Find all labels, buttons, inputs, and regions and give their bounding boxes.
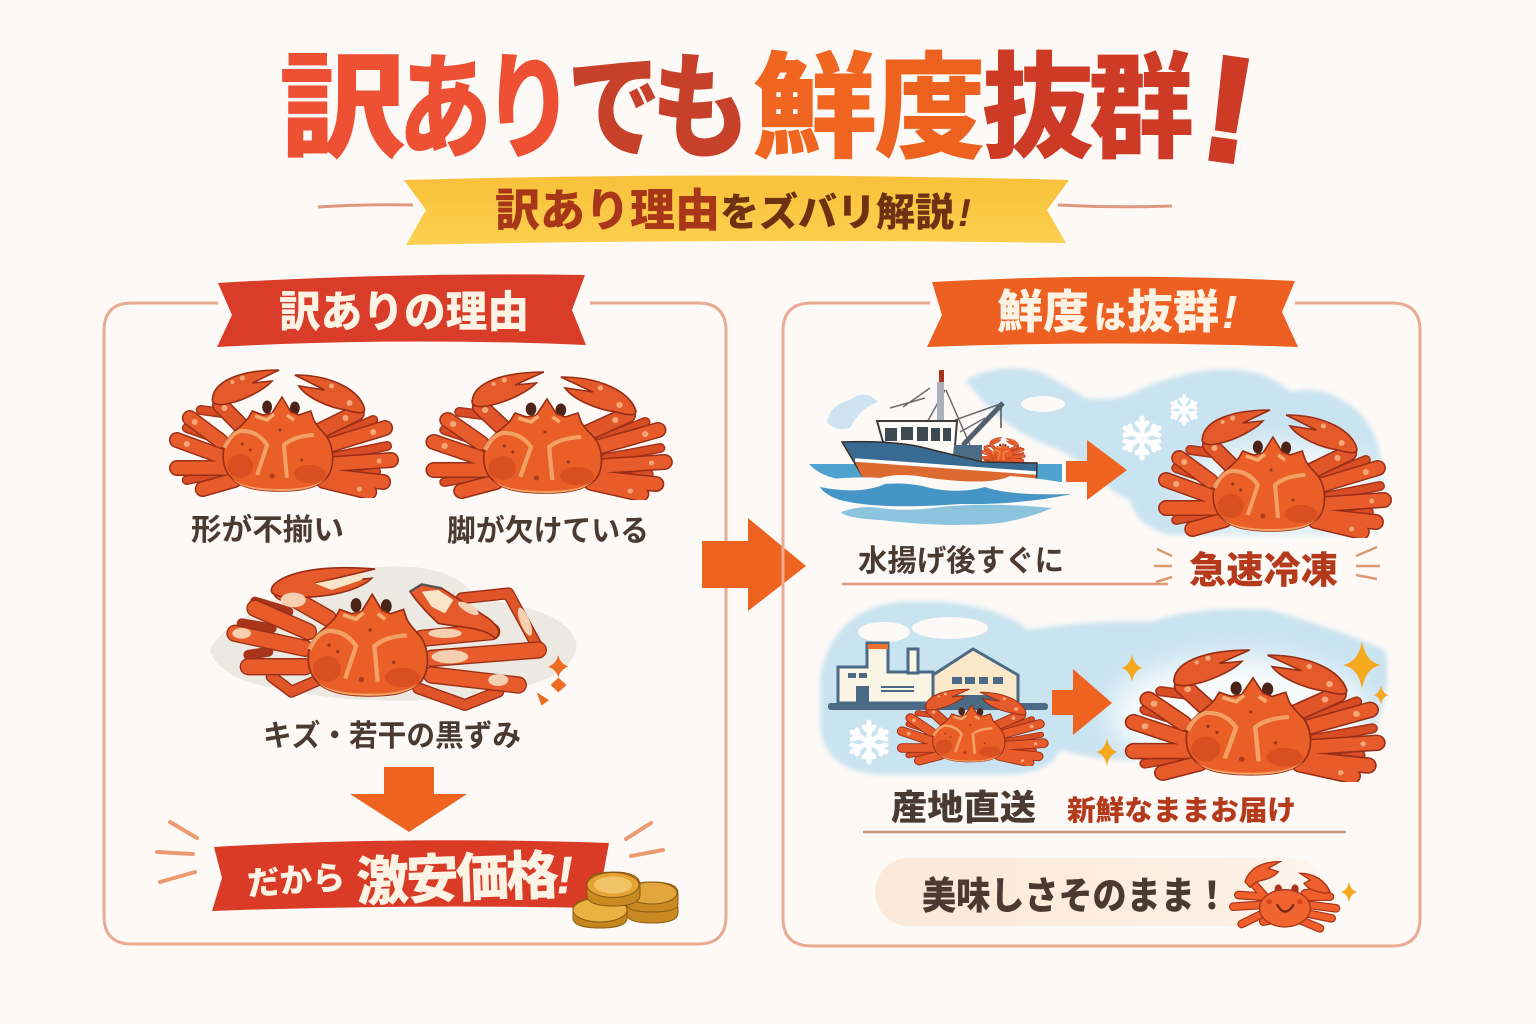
underline	[863, 831, 1346, 833]
label: scratches: キズ・若干の黒ずみ	[263, 719, 521, 753]
title: で	[567, 45, 661, 173]
accent ticks	[842, 547, 1380, 584]
icon: snowflake factory	[852, 722, 886, 762]
subtitle ribbon	[318, 176, 1172, 245]
title: り	[483, 45, 574, 173]
subtitle ribbon: !	[958, 192, 971, 235]
title: 抜	[982, 45, 1094, 173]
crab: uneven shape	[177, 370, 391, 492]
background wash: factory	[820, 602, 1387, 775]
title: あ	[398, 45, 492, 173]
subtitle ribbon: をズバリ解説	[720, 191, 954, 235]
callout: cheap price: !	[555, 846, 575, 906]
icon: mascot crab	[1233, 862, 1336, 928]
label: quick freeze: 急速冷凍	[1189, 550, 1338, 591]
panel: freshness	[783, 277, 1420, 946]
heading: reasons: 訳ありの理由	[279, 289, 529, 337]
icon: small flake	[1172, 396, 1196, 424]
title: !	[1193, 25, 1265, 195]
sea	[809, 464, 1062, 482]
icon: factory	[828, 643, 1048, 710]
scene: fishing boat and freezing	[809, 368, 1385, 535]
callout: cheap price	[157, 822, 663, 913]
icon: boat	[842, 370, 1037, 489]
callout: cheap price: だから	[246, 859, 346, 902]
label: direct from origin: 産地直送	[891, 789, 1036, 828]
heading: reasons	[217, 274, 586, 347]
crab: missing leg	[434, 372, 664, 494]
sparkles: fresh	[1096, 641, 1389, 766]
callout: cheap price: 激安価格	[355, 847, 560, 913]
heading: freshness	[927, 277, 1298, 347]
heading: freshness: !	[1222, 286, 1237, 338]
icon: sparkle	[1341, 882, 1357, 902]
crab: factory	[902, 689, 1043, 762]
panel frame: left	[104, 303, 726, 944]
crab: scratches and dark marks	[210, 566, 577, 706]
crab: fresh	[1134, 650, 1377, 776]
waves	[820, 484, 1072, 506]
label: uneven shape: 形が不揃い	[191, 513, 344, 547]
arrow: factory to fresh	[1052, 669, 1112, 735]
title: 鮮	[752, 45, 877, 173]
icon: snowflake	[1125, 418, 1159, 458]
panel frame: right	[783, 303, 1420, 946]
icon: coins	[573, 872, 678, 928]
white foam	[820, 475, 1072, 496]
title: 群	[1089, 45, 1194, 173]
background wash: ice	[966, 368, 1383, 535]
heading: freshness: 鮮度	[997, 286, 1089, 338]
label: missing leg: 脚が欠けている	[447, 514, 649, 548]
arrow: down	[350, 767, 467, 832]
label: right after landing: 水揚げ後すぐに	[858, 545, 1064, 578]
arrow: boat to freeze	[1066, 440, 1127, 500]
callout: delicious	[875, 858, 1325, 926]
title: 訳	[279, 45, 406, 173]
subtitle ribbon: 訳あり理由	[495, 185, 720, 236]
heading: freshness: は	[1094, 299, 1126, 335]
crab: frozen	[1166, 410, 1384, 532]
title: 度	[874, 45, 986, 173]
panel: reasons	[104, 274, 726, 944]
title: も	[651, 45, 750, 173]
callout: delicious: 美味しさそのまま！	[922, 876, 1229, 918]
title	[279, 25, 1265, 195]
arrow: main right	[702, 518, 806, 611]
heading: freshness: 抜群	[1127, 286, 1219, 338]
scene: factory direct	[820, 602, 1389, 776]
label: delivered fresh: 新鮮なままお届け	[1067, 795, 1296, 826]
